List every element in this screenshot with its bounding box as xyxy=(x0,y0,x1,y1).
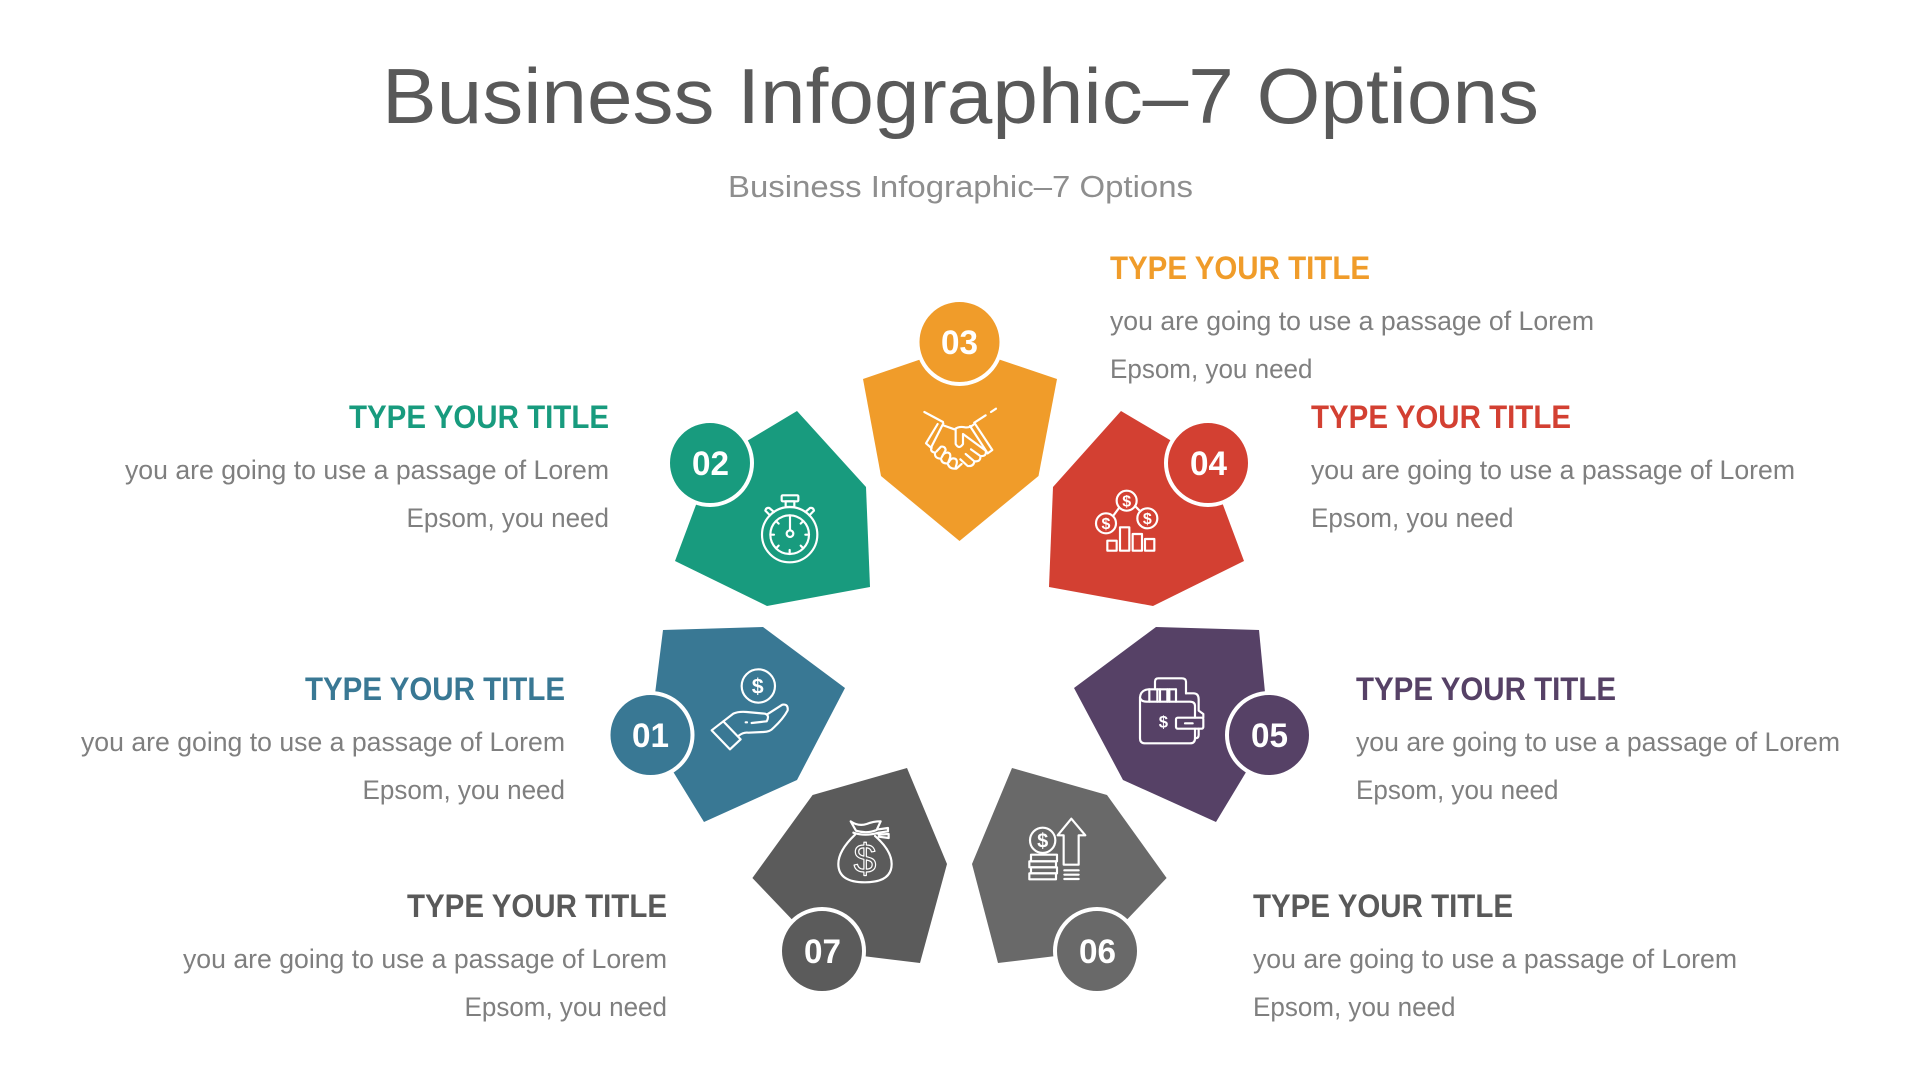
icon: hand holding coin: $ xyxy=(752,674,764,698)
subtitle: Business Infographic–7 Options xyxy=(728,169,1193,204)
description 04: Epsom, you need xyxy=(1311,503,1514,533)
description 07: Epsom, you need xyxy=(464,992,667,1022)
description 04 xyxy=(1311,455,1795,533)
description 05 xyxy=(1356,727,1840,805)
panel: option 02 xyxy=(125,399,870,606)
number badge 02: 02 xyxy=(692,445,729,483)
heading 04: TYPE YOUR TITLE xyxy=(1311,399,1571,435)
panel: option 07 xyxy=(183,768,947,1022)
description 03: Epsom, you need xyxy=(1110,354,1312,384)
pentagon 04 xyxy=(1049,411,1244,606)
panel: option 06 xyxy=(972,768,1737,1022)
number badge 04 xyxy=(1166,421,1250,505)
description 01: Epsom, you need xyxy=(362,775,565,805)
pentagon 01 xyxy=(650,627,845,822)
description 07 xyxy=(183,944,667,1022)
icon: money bag: $ xyxy=(854,836,876,882)
icon: handshake xyxy=(924,409,996,469)
icon: coins with arrow: $ xyxy=(1037,830,1048,852)
description 06 xyxy=(1253,944,1737,1022)
description 06: you are going to use a passage of Lorem xyxy=(1253,944,1737,974)
heading 02: TYPE YOUR TITLE xyxy=(349,399,609,435)
number badge 03: 03 xyxy=(941,324,978,362)
description 01 xyxy=(81,727,565,805)
description 02: you are going to use a passage of Lorem xyxy=(125,455,609,485)
heading 06: TYPE YOUR TITLE xyxy=(1253,888,1513,924)
pentagon 07 xyxy=(752,768,947,963)
number badge 06: 06 xyxy=(1079,933,1116,971)
panel: option 05 xyxy=(1074,627,1840,822)
pentagon 05 xyxy=(1074,627,1269,822)
description 03: you are going to use a passage of Lorem xyxy=(1110,306,1594,336)
icon: money chart: $ xyxy=(1143,511,1152,528)
icon: money chart: $ xyxy=(1122,493,1131,510)
number badge 07: 07 xyxy=(804,933,841,971)
icon: money chart xyxy=(1096,491,1157,551)
pentagon 06 xyxy=(972,768,1167,963)
title: Business Infographic–7 Options xyxy=(382,52,1539,140)
heading 07: TYPE YOUR TITLE xyxy=(407,888,667,924)
description 03 xyxy=(1110,306,1594,384)
number badge 05 xyxy=(1227,693,1311,777)
pentagon 02 xyxy=(675,411,870,606)
icon: coins with arrow xyxy=(1029,819,1085,879)
number badge 01 xyxy=(608,693,692,777)
icon: wallet: $ xyxy=(1159,712,1169,731)
description 02 xyxy=(125,455,609,533)
description 05: you are going to use a passage of Lorem xyxy=(1356,727,1840,757)
number badge 03 xyxy=(918,300,1002,384)
number badge 04: 04 xyxy=(1190,445,1227,483)
panel: option 04 xyxy=(1049,399,1795,606)
number badge 05: 05 xyxy=(1251,717,1288,755)
description 06: Epsom, you need xyxy=(1253,992,1456,1022)
description 01: you are going to use a passage of Lorem xyxy=(81,727,565,757)
icon: money bag xyxy=(838,821,892,882)
icon: money chart: $ xyxy=(1102,516,1111,533)
number badge 02 xyxy=(668,421,752,505)
description 05: Epsom, you need xyxy=(1356,775,1558,805)
icon: stopwatch xyxy=(762,495,817,562)
heading 05: TYPE YOUR TITLE xyxy=(1356,671,1616,707)
number badge 07 xyxy=(780,909,864,993)
description 04: you are going to use a passage of Lorem xyxy=(1311,455,1795,485)
number badge 06 xyxy=(1055,909,1139,993)
heading 03: TYPE YOUR TITLE xyxy=(1110,250,1370,286)
icon: hand holding coin xyxy=(712,669,788,749)
panel: option 03 xyxy=(863,250,1594,541)
icon: wallet xyxy=(1140,678,1203,743)
panel: option 01 xyxy=(81,627,845,822)
number badge 01: 01 xyxy=(632,717,669,755)
description 02: Epsom, you need xyxy=(406,503,609,533)
pentagon 03 xyxy=(863,346,1057,541)
description 07: you are going to use a passage of Lorem xyxy=(183,944,667,974)
heading 01: TYPE YOUR TITLE xyxy=(305,671,565,707)
